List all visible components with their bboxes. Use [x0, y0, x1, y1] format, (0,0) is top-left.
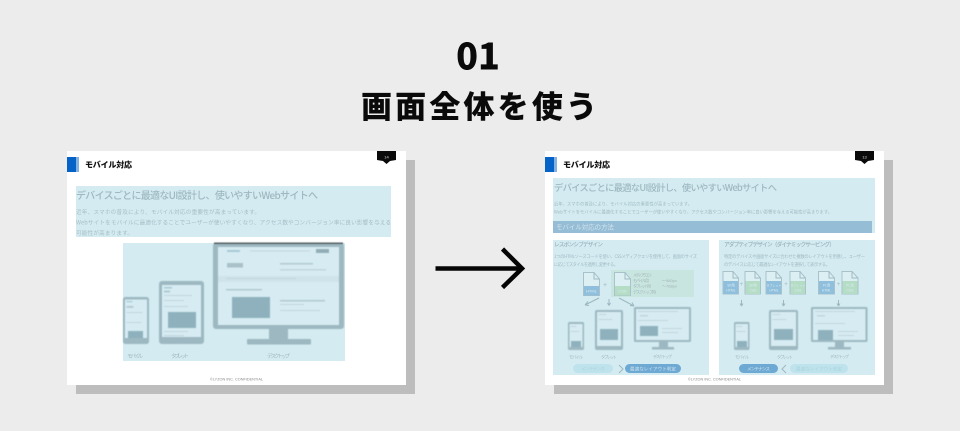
device labels: タブレット — [171, 352, 189, 360]
pill: per device layout — [625, 364, 681, 373]
icon: chevron — [782, 365, 786, 373]
panel paragraph: 1つのHTMLソースコードを使い、CSSメディアクエリを使用して、画面のサイズ — [554, 253, 698, 260]
device labels: デスクトップ — [267, 352, 290, 360]
icon: file set desktop: PC用 — [846, 282, 854, 288]
icon: desktop — [634, 307, 691, 350]
slide paragraph — [554, 201, 832, 216]
pill: per device layout: 最適なレイアウト判定 — [630, 366, 676, 372]
slide heading: デバイスごとに最適なUI設計し、使いやすいWebサイトへ — [76, 187, 318, 202]
icon: file set tablet: + — [784, 282, 788, 288]
icon: tablet — [159, 281, 204, 344]
media query text: デスクトップ用 — [633, 288, 656, 296]
slide sheet — [67, 151, 406, 385]
panel: right slide — [545, 151, 893, 394]
page badge: 14 — [384, 154, 389, 160]
title heading: 画面全体を使う — [361, 82, 597, 127]
media query text: 〜980px — [662, 278, 677, 283]
device labels: タブレット — [601, 354, 617, 360]
icon: tablet — [769, 310, 798, 350]
media query text: モバイル用 — [633, 278, 649, 284]
slide footer: ©LYZON INC. CONFIDENTIAL — [688, 378, 741, 382]
pill: maintenance — [573, 364, 613, 373]
icon: tablet — [595, 310, 623, 350]
arrow — [436, 249, 522, 288]
flow arrows — [740, 300, 840, 306]
panel paragraph: 特定のデバイスや画面サイズに合わせた複数のレイアウトを用意し、ユーザー — [724, 253, 865, 260]
icon: file set tablet: タブレット — [766, 282, 782, 288]
slide paragraph: Webサイトをモバイルに最適化することでユーザーが使いやすくなり、アクセス数やコンバージョン率に良い影響を与える — [76, 218, 391, 226]
panel: responsive design — [553, 240, 709, 375]
device labels — [569, 353, 673, 360]
slide heading: デバイスごとに最適なUI設計し、使いやすいWebサイトへ — [554, 180, 777, 194]
icon: blue header marker — [545, 157, 556, 172]
pill: per device layout: 最適なレイアウト判定 — [796, 366, 842, 372]
media query text — [633, 272, 677, 296]
section bar: モバイル対応の方法 — [556, 222, 614, 232]
slide paragraph: 可能性が高まります。 — [76, 229, 133, 237]
device labels: デスクトップ — [653, 353, 673, 360]
icon: file set mobile: CSS — [750, 288, 757, 292]
slide header title: モバイル対応 — [85, 160, 132, 170]
panel: left slide — [67, 151, 415, 394]
icon: desktop — [811, 307, 868, 350]
slide footer: ©LYZON INC. CONFIDENTIAL — [210, 378, 263, 382]
section bar — [553, 221, 872, 233]
panel heading: レスポンシブデザイン — [554, 241, 603, 249]
icon: file set tablet: HTML — [769, 288, 779, 292]
slide paragraph: Webサイトをモバイルに最適化することでユーザーが使いやすくなり、アクセス数やコンバージョン率に良い影響を与える可能性が高まります。 — [554, 209, 832, 216]
device labels: タブレット — [777, 354, 793, 360]
slide sheet — [545, 151, 884, 385]
icon: file set mobile: SP用 — [749, 282, 757, 288]
slide shadow — [554, 160, 893, 394]
icon: file set mobile — [723, 272, 760, 294]
pill: maintenance — [739, 364, 778, 373]
icon: file set tablet: CSS — [795, 288, 802, 292]
page badge — [377, 151, 396, 164]
icon: file set desktop — [818, 272, 858, 294]
panel: adaptive design — [719, 240, 875, 375]
title number: 01 — [456, 28, 500, 80]
page badge: 13 — [862, 154, 867, 160]
icon: phone — [734, 322, 750, 350]
panel paragraph: のデバイスに応じて最適なレイアウトを選択して表示する。 — [724, 261, 830, 268]
pill: maintenance: メンテナンス — [747, 366, 770, 372]
panel paragraph: に応じてスタイルを適用し変更する。 — [554, 261, 618, 268]
device labels — [127, 352, 290, 360]
icon: HTML file — [584, 272, 600, 296]
highlighted text block — [76, 186, 391, 237]
icon: file set tablet — [766, 272, 806, 294]
icon: blue header marker — [67, 157, 78, 172]
panel paragraph — [554, 253, 698, 268]
icon: file set mobile: SP用 — [727, 282, 735, 288]
page badge — [855, 151, 874, 164]
media query text: 〜768px — [662, 284, 677, 288]
media query box — [611, 270, 694, 297]
pill: maintenance: メンテナンス — [581, 366, 605, 372]
media query text: メディアクエリ — [633, 272, 652, 278]
device labels: モバイル — [735, 354, 749, 360]
panel paragraph — [724, 253, 865, 268]
slide paragraph — [76, 208, 391, 237]
icon: file set desktop: + — [837, 282, 841, 288]
icon: mobile phone — [123, 297, 149, 344]
device labels — [735, 353, 850, 360]
icon: file set mobile: HTML — [726, 288, 736, 292]
icon: CSS file — [614, 272, 630, 296]
device labels: モバイル — [127, 352, 143, 360]
device labels: デスクトップ — [830, 353, 850, 360]
icon: chevron — [619, 365, 623, 373]
pill: per device layout — [790, 364, 848, 373]
media query text: タブレット用 — [633, 282, 651, 290]
icon: file set tablet: タブレット — [790, 282, 806, 288]
panel heading: アダプティブデザイン（ダイナミックサービング） — [724, 240, 835, 249]
slide paragraph: 近年、スマホの普及により、モバイル対応の重要性が高まっています。 — [76, 208, 260, 216]
icon: file set desktop: CSS — [847, 288, 854, 292]
icon: HTML file: HTML — [586, 288, 598, 294]
highlighted intro block — [553, 178, 875, 233]
plus: + — [603, 282, 607, 289]
slide header title: モバイル対応 — [563, 160, 610, 170]
icon: file set mobile: + — [740, 282, 744, 288]
icon: file set desktop: HTML — [822, 288, 831, 292]
device labels: モバイル — [569, 354, 583, 360]
icon: phone — [568, 322, 584, 350]
device illustration — [123, 242, 345, 361]
icon: desktop monitor — [213, 242, 344, 344]
flow arrows — [585, 298, 634, 306]
icon: file set desktop: PC用 — [823, 282, 830, 288]
icon: CSS file: CSS — [618, 288, 627, 294]
slide paragraph: 近年、スマホの普及により、モバイル対応の重要性が高まっています。 — [554, 201, 692, 208]
slide shadow — [76, 160, 415, 394]
